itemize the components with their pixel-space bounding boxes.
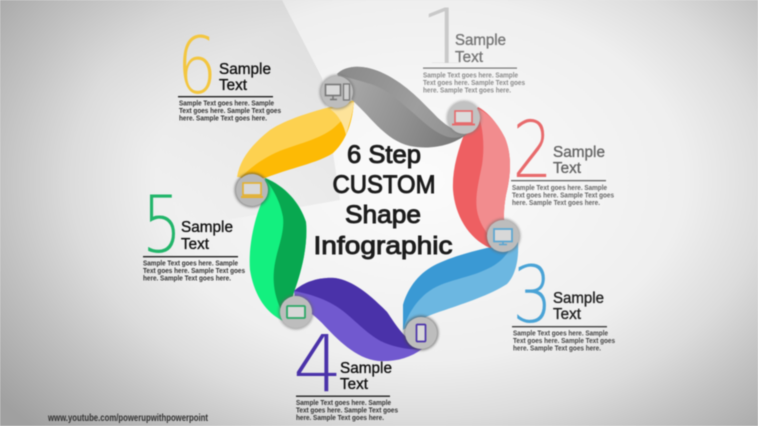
petal 1: grey (337, 67, 467, 148)
step 6 label: Text (219, 77, 248, 94)
step 3 label: Text (553, 306, 582, 323)
body 2 (512, 185, 614, 207)
heading 5: Sample (181, 219, 233, 236)
ribbon petals (237, 67, 518, 361)
body 4: here. Sample Text goes here. (296, 415, 384, 422)
footer url: www.youtube.com/powerupwithpowerpoint (47, 412, 208, 424)
icon: yellow laptop (234, 172, 270, 208)
body 5 (143, 260, 245, 282)
number 3: 3 (512, 251, 552, 341)
heading 3: Sample (553, 290, 604, 307)
step 1 label (420, 0, 525, 94)
body 1 (423, 72, 525, 94)
heading 4: Sample (340, 360, 392, 377)
heading 1: Sample (455, 32, 506, 49)
icon: purple phone (404, 316, 438, 350)
body 3: here. Sample Text goes here. (513, 346, 601, 352)
body 6: Text goes here. Sample Text goes (179, 108, 281, 115)
step 2 label: Text (553, 160, 582, 177)
icon: desktop computer (320, 74, 354, 110)
icon: blue monitor (486, 218, 520, 254)
body 1: Sample Text goes here. Sample (423, 72, 518, 80)
center title: Infographic (314, 232, 452, 260)
step 6 label (177, 22, 281, 122)
background wedge (0, 0, 340, 260)
step 3 label (512, 251, 615, 352)
petal 4: purple (294, 278, 422, 361)
body 3: Text goes here. Sample Text goes (513, 338, 615, 345)
heading 6: Sample (219, 61, 271, 78)
petal 6: yellow (237, 100, 354, 178)
body 1: here. Sample Text goes here. (423, 88, 511, 94)
step 1 label: Text (455, 49, 484, 66)
center title: 6 Step (347, 141, 421, 169)
body 4 (296, 400, 398, 422)
step 5 label: Text (181, 236, 210, 253)
step 4 label: Text (340, 376, 369, 393)
body 2: here. Sample Text goes here. (512, 200, 600, 207)
petal 3: blue (403, 242, 518, 330)
body 2: Text goes here. Sample Text goes (512, 192, 614, 200)
icon badges (234, 74, 520, 350)
body 5: Text goes here. Sample Text goes (143, 268, 245, 275)
step 2 label (511, 106, 614, 207)
body 4: Text goes here. Sample Text goes (296, 408, 398, 414)
body 6: Sample Text goes here. Sample (179, 100, 274, 108)
icon: green tablet (278, 294, 314, 330)
body 2: Sample Text goes here. Sample (512, 185, 607, 192)
body 3: Sample Text goes here. Sample (513, 330, 608, 338)
body 5: here. Sample Text goes here. (143, 276, 231, 282)
number 4: 4 (293, 320, 343, 410)
center title (314, 141, 452, 260)
icon: red laptop (446, 100, 482, 136)
petal 5: green (250, 178, 306, 322)
step 5 label (142, 181, 245, 282)
number 6: 6 (177, 22, 217, 112)
center title: Shape (345, 201, 421, 229)
center title: CUSTOM (332, 171, 436, 199)
body 3 (513, 330, 615, 352)
body 4: Sample Text goes here. Sample (296, 400, 391, 407)
step 4 label (293, 320, 398, 422)
petal 2: red (453, 107, 510, 248)
heading 2: Sample (553, 144, 605, 161)
body 1: Text goes here. Sample Text goes (423, 80, 525, 87)
body 6: here. Sample Text goes here. (179, 116, 267, 122)
number 5: 5 (142, 181, 182, 271)
body 6 (179, 100, 281, 122)
body 5: Sample Text goes here. Sample (143, 260, 238, 268)
number 2: 2 (512, 106, 552, 196)
